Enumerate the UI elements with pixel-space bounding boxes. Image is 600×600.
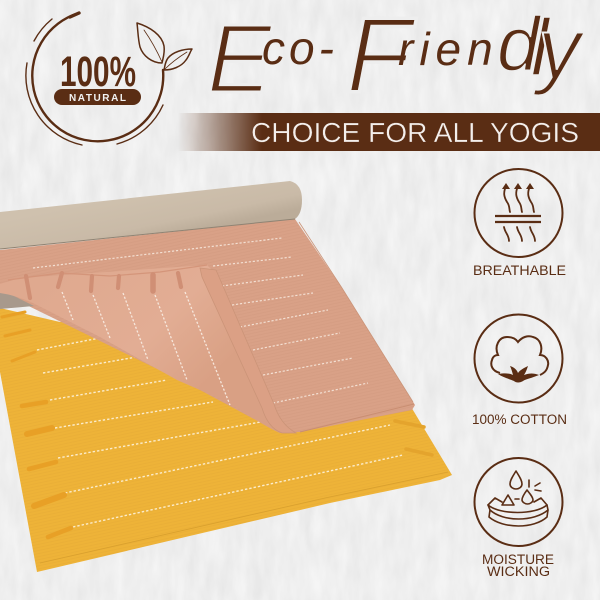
yellow mat tassels <box>2 312 432 537</box>
title: Eco-Friendly: rien <box>398 23 499 75</box>
grey shadow under fold <box>0 289 34 309</box>
logo 100%: 100% <box>60 48 136 96</box>
product photo: folded yoga mats <box>0 181 452 572</box>
feature: 100% cotton <box>472 314 567 427</box>
label: breathable: BREATHABLE <box>473 263 566 278</box>
logo: 100% natural badge <box>26 13 192 145</box>
banner: choice for all yogis: CHOICE FOR ALL YOGIS <box>251 117 579 148</box>
banner: choice for all yogis <box>178 113 600 151</box>
logo natural pill <box>54 89 141 105</box>
pink mat back <box>0 219 415 433</box>
title: Eco-Friendly: co- <box>262 22 338 74</box>
yellow mat stitching <box>37 338 403 527</box>
pink mat stitching <box>33 238 368 403</box>
title: Eco-Friendly: l <box>531 3 551 92</box>
label: moisture wicking: WICKING <box>487 564 550 579</box>
icon: moisture wicking layers <box>474 458 562 546</box>
flap hem <box>200 268 296 433</box>
icon: breathable fabric <box>474 169 562 257</box>
yellow mat <box>0 260 452 572</box>
logo leaves <box>137 23 192 70</box>
logo ring <box>26 13 163 145</box>
icon: cotton boll <box>474 314 562 402</box>
pink mat folded flap <box>0 265 296 433</box>
logo natural pill: NATURAL <box>69 93 126 104</box>
flap fringe string <box>8 265 207 280</box>
title: Eco-Friendly: y <box>533 2 585 97</box>
label: moisture wicking: MOISTURE <box>482 552 554 567</box>
label: moisture wicking <box>482 552 554 579</box>
title: Eco-Friendly: d <box>497 2 542 87</box>
title: Eco-Friendly: E <box>207 4 273 113</box>
beige mat roll <box>0 181 302 249</box>
flap stitching <box>62 292 230 405</box>
yellow mat bottom hem <box>40 472 448 563</box>
flap tassels <box>26 273 181 298</box>
feature: moisture wicking <box>474 458 562 579</box>
feature: breathable <box>473 169 566 278</box>
label: 100% cotton: 100% COTTON <box>472 412 567 427</box>
